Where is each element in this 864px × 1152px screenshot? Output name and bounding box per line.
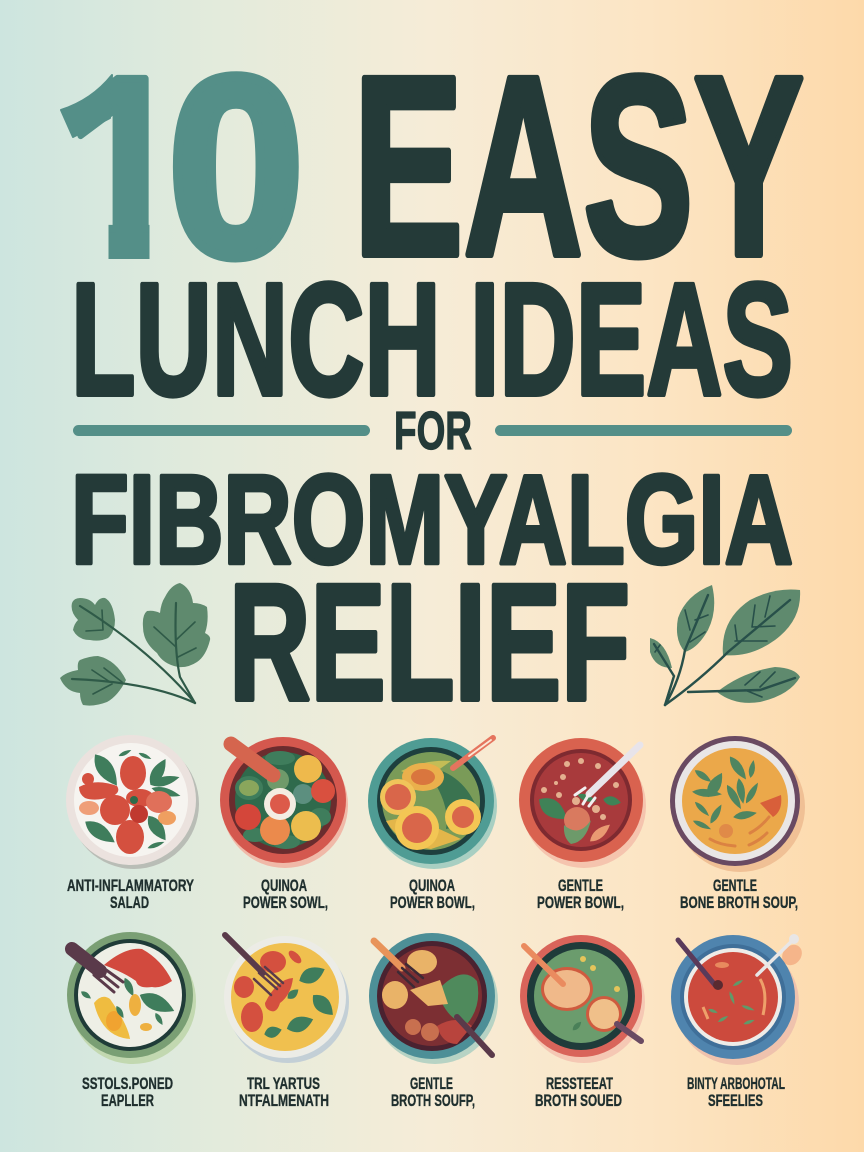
meal 5: bone broth soup: [670, 736, 805, 912]
meal 2: quinoa bowl: [220, 737, 348, 912]
label: NTFALMENATH: [239, 1092, 329, 1110]
label: GENTLE: [410, 1075, 453, 1093]
label: SFEELIES: [708, 1092, 763, 1110]
label: POWER BOWL,: [537, 894, 624, 912]
label: SSTOLS.PONED: [82, 1075, 173, 1093]
label: [687, 1075, 785, 1110]
label: QUINOA: [409, 877, 455, 895]
label: RESSTEEAT: [546, 1075, 613, 1093]
label: GENTLE: [558, 877, 603, 895]
title line: for with rules: FOR: [394, 401, 472, 461]
title line: 10 EASY: 1: [66, 24, 185, 310]
title line: for with rules: [73, 401, 792, 461]
meal 8: dark broth bowl: [369, 933, 498, 1110]
meal 10: tomato soup bowl: [671, 934, 806, 1110]
meal 3: quinoa bowl teal: [368, 738, 497, 912]
label: POWER SOWL,: [243, 894, 328, 912]
label: BONE BROTH SOUP,: [680, 894, 798, 912]
label: BROTH SOUED: [535, 1092, 622, 1110]
label: GENTLE: [713, 877, 757, 895]
label: ANTI-INFLAMMATORY: [67, 877, 194, 895]
label: BINTY ARBOHOTAL: [687, 1075, 785, 1093]
label: [239, 1075, 329, 1110]
label: [535, 1075, 622, 1110]
label: [67, 877, 194, 912]
label: [390, 877, 475, 912]
meal 1: salad plate: [66, 735, 199, 912]
label: [680, 877, 798, 912]
label: [391, 1075, 475, 1110]
icon: right herb sprig: [650, 585, 800, 705]
label: POWER BOWL,: [390, 894, 475, 912]
label: [243, 877, 328, 912]
label: TRL YARTUS: [247, 1075, 320, 1093]
meal 7: yellow curry bowl: [224, 935, 349, 1110]
label: [537, 877, 624, 912]
title line: 10 EASY: [60, 71, 804, 262]
icon: left herb sprig: [60, 583, 210, 706]
label: EAPLLER: [101, 1092, 154, 1110]
meal 4: gentle red bowl: [519, 738, 646, 912]
label: BROTH SOUFP,: [391, 1092, 475, 1110]
label: SALAD: [110, 894, 149, 912]
title: [60, 71, 804, 702]
meal 9: green soup bowl: [520, 935, 645, 1110]
bowl grid: [66, 735, 806, 1110]
title line: 10 EASY: 0: [168, 24, 304, 310]
meal 6: green rim plate: [67, 932, 196, 1110]
label: [82, 1075, 173, 1110]
title line: relief: RELIEF: [229, 550, 630, 736]
label: QUINOA: [261, 877, 307, 895]
